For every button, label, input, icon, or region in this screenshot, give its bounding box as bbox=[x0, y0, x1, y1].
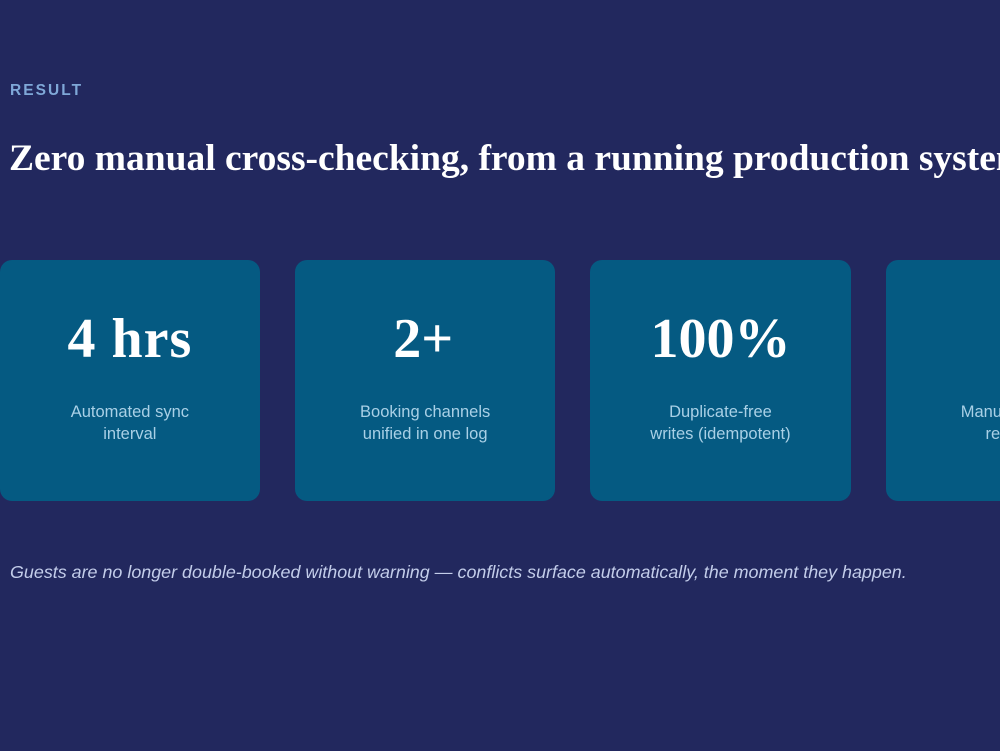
title: Zero manual cross-checking, from a running production system bbox=[9, 138, 1000, 179]
closing note: Guests are no longer double-booked without warning — conflicts surface automatically, the moment they happen. bbox=[10, 562, 907, 582]
stat label: unified in one log bbox=[363, 425, 488, 443]
stat value: 2+ bbox=[393, 308, 453, 370]
stat card: sync interval bbox=[0, 260, 260, 500]
eyebrow label: RESULT bbox=[10, 82, 83, 99]
stat label: interval bbox=[103, 425, 156, 443]
stat label bbox=[70, 403, 189, 443]
stat label: writes (idempotent) bbox=[650, 425, 791, 443]
stat card: manual checks bbox=[886, 260, 1000, 500]
stat label: Duplicate-free bbox=[669, 403, 772, 421]
stat card: duplicate-free writes bbox=[590, 260, 851, 500]
stat label bbox=[650, 403, 791, 443]
stat value: 4 hrs bbox=[67, 308, 192, 370]
stat label bbox=[961, 403, 1000, 443]
stat label bbox=[360, 403, 490, 443]
stat value: 100% bbox=[650, 308, 790, 370]
stat value bbox=[886, 307, 1000, 371]
stat card: booking channels bbox=[295, 260, 555, 500]
stat label: Booking channels bbox=[360, 403, 490, 421]
stat label: Automated sync bbox=[71, 403, 189, 421]
